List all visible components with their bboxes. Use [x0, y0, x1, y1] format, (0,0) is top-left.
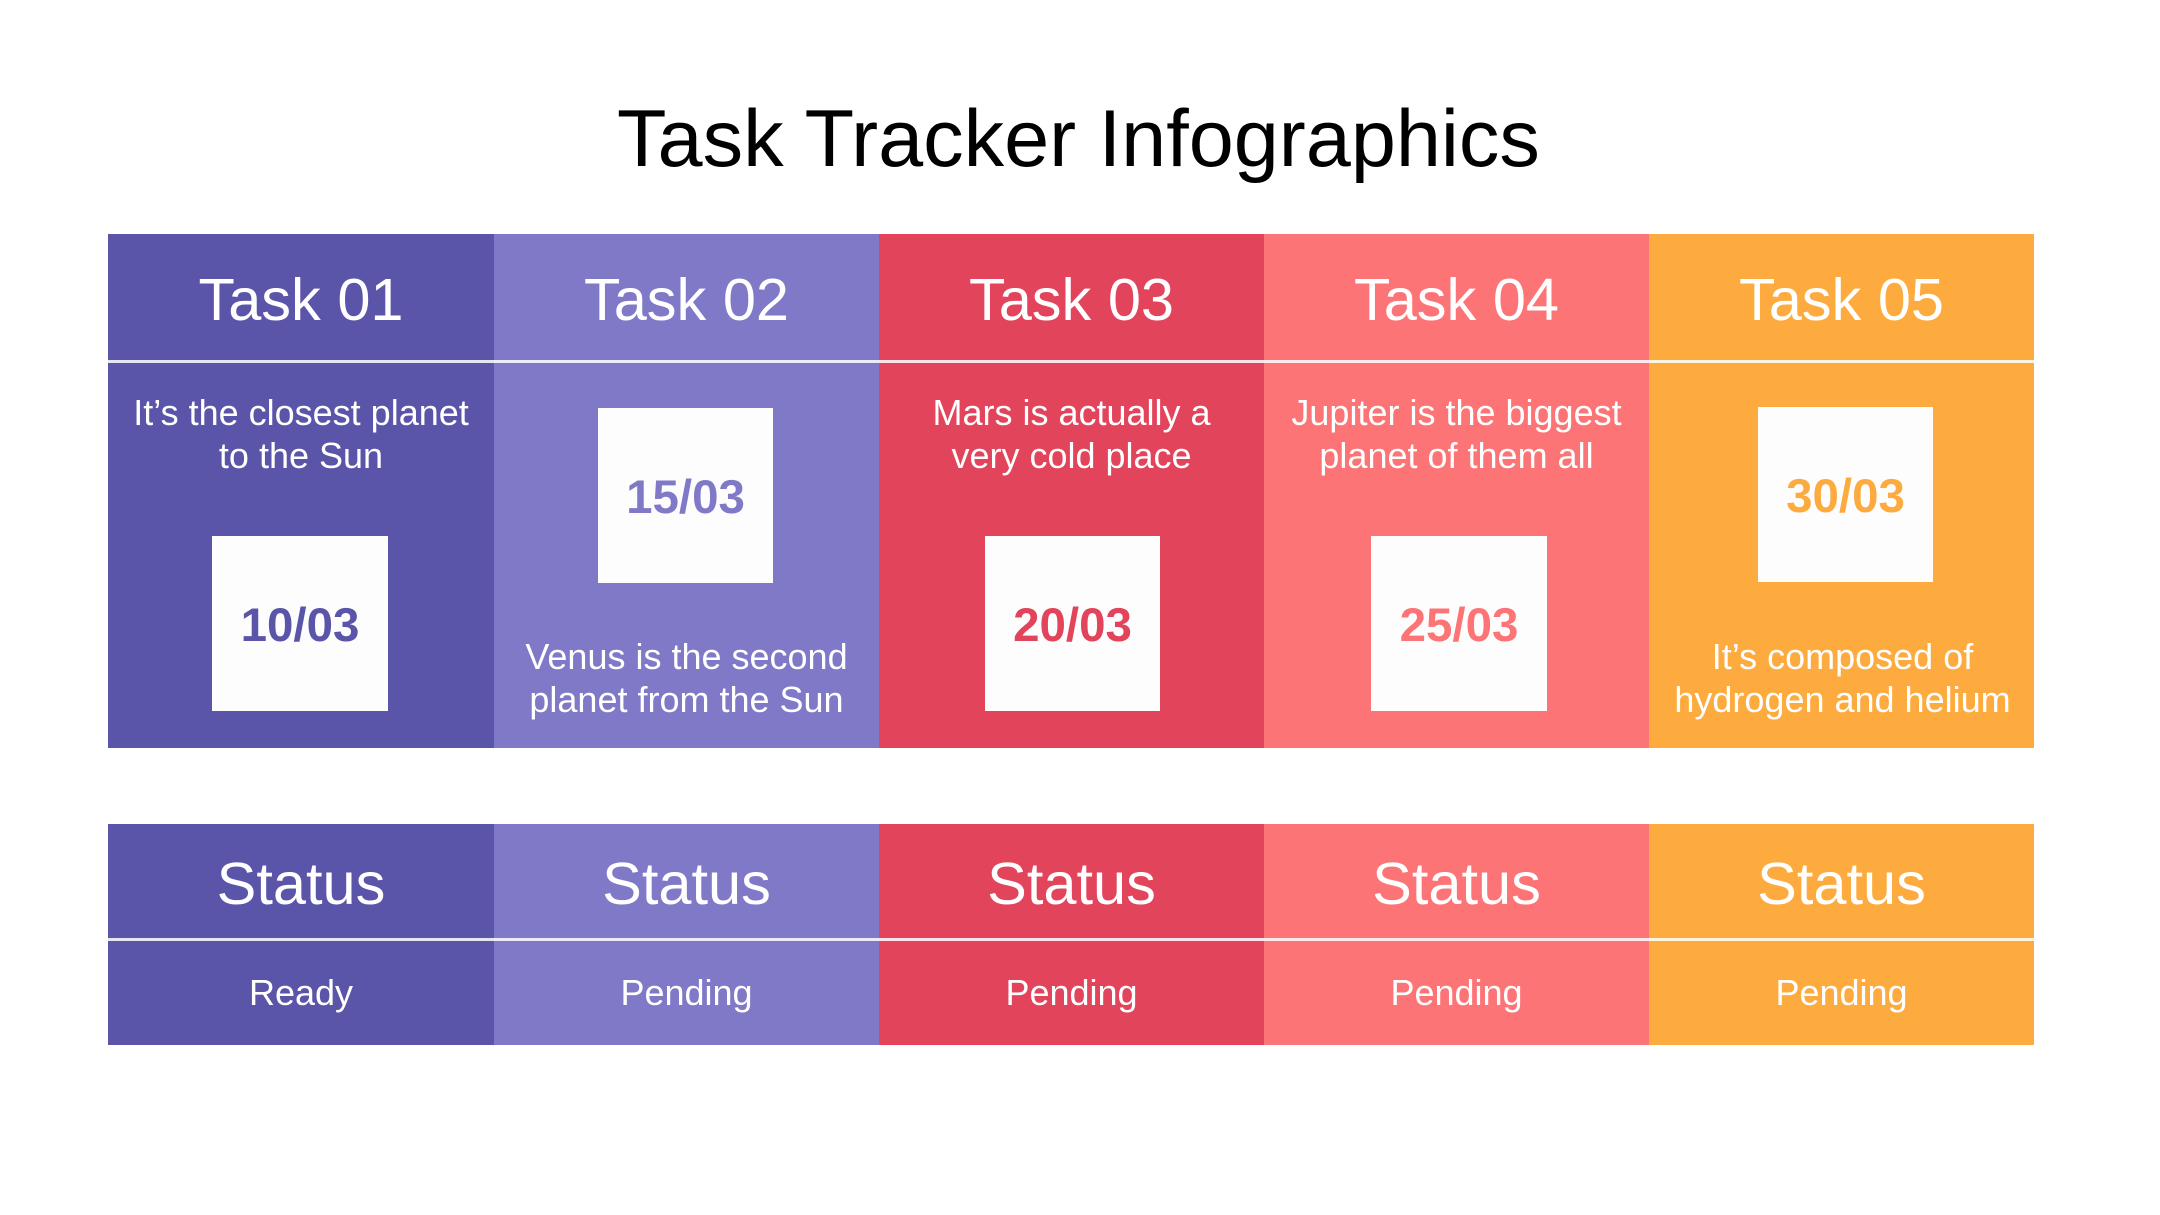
date card: 15/03: 15/03: [626, 471, 745, 524]
date card: 30/03: [1758, 407, 1933, 582]
text: task 03 description: very cold place: [951, 435, 1192, 476]
status heading: Status: [1757, 850, 1926, 917]
status: task 02: [494, 824, 879, 1045]
status value: Pending: [620, 972, 753, 1013]
status: task 04: [1264, 824, 1649, 1045]
text: task 04 description: planet of them all: [1319, 435, 1594, 476]
heading: task 01: Task 01: [198, 266, 404, 333]
heading: task 05: Task 05: [1739, 266, 1944, 333]
date card: 25/03: [1371, 536, 1547, 711]
date card: 20/03: [985, 536, 1160, 711]
text: task 01 description: It’s the closest planet: [133, 392, 469, 433]
status heading: Status: [217, 850, 385, 917]
text: task 04 description: [1291, 392, 1622, 476]
status value: Ready: [249, 972, 353, 1013]
text: task 02 description: [525, 636, 848, 720]
panel: task 05: [1649, 234, 2034, 748]
text: task 01 description: [133, 392, 469, 476]
text: task 04 description: Jupiter is the biggest: [1291, 392, 1622, 433]
text: task 05 description: It’s composed of: [1712, 636, 1973, 677]
status value: Pending: [1390, 972, 1523, 1013]
text: task 02 description: Venus is the second: [525, 636, 848, 677]
panel: task 04: [1264, 234, 1649, 748]
panel: task 02: [494, 234, 879, 748]
date card: 15/03: [598, 408, 773, 583]
date card: 10/03: 10/03: [241, 599, 359, 652]
date card: 30/03: 30/03: [1786, 470, 1905, 523]
status heading: Status: [602, 850, 771, 917]
date card: 20/03: 20/03: [1013, 599, 1132, 652]
text: task 01 description: to the Sun: [219, 435, 383, 476]
text: task 05 description: hydrogen and helium: [1674, 679, 2011, 720]
date card: 25/03: 25/03: [1400, 599, 1518, 652]
status value: Pending: [1005, 972, 1138, 1013]
heading: task 02: Task 02: [584, 266, 789, 333]
panel: task 03: [879, 234, 1264, 748]
date card: 10/03: [212, 536, 388, 711]
status: task 03: [879, 824, 1264, 1045]
text: task 03 description: Mars is actually a: [932, 392, 1211, 433]
panel: task 01: [108, 234, 494, 748]
status heading: Status: [1372, 850, 1541, 917]
status heading: Status: [987, 850, 1156, 917]
heading: task 04: Task 04: [1354, 266, 1559, 333]
title: Task Tracker Infographics: [617, 94, 1540, 184]
status value: Pending: [1775, 972, 1908, 1013]
status: task 01: [108, 824, 494, 1045]
text: task 05 description: [1674, 636, 2011, 720]
heading: task 03: Task 03: [969, 266, 1174, 333]
text: task 02 description: planet from the Sun: [529, 679, 844, 720]
text: task 03 description: [932, 392, 1211, 476]
status: task 05: [1649, 824, 2034, 1045]
